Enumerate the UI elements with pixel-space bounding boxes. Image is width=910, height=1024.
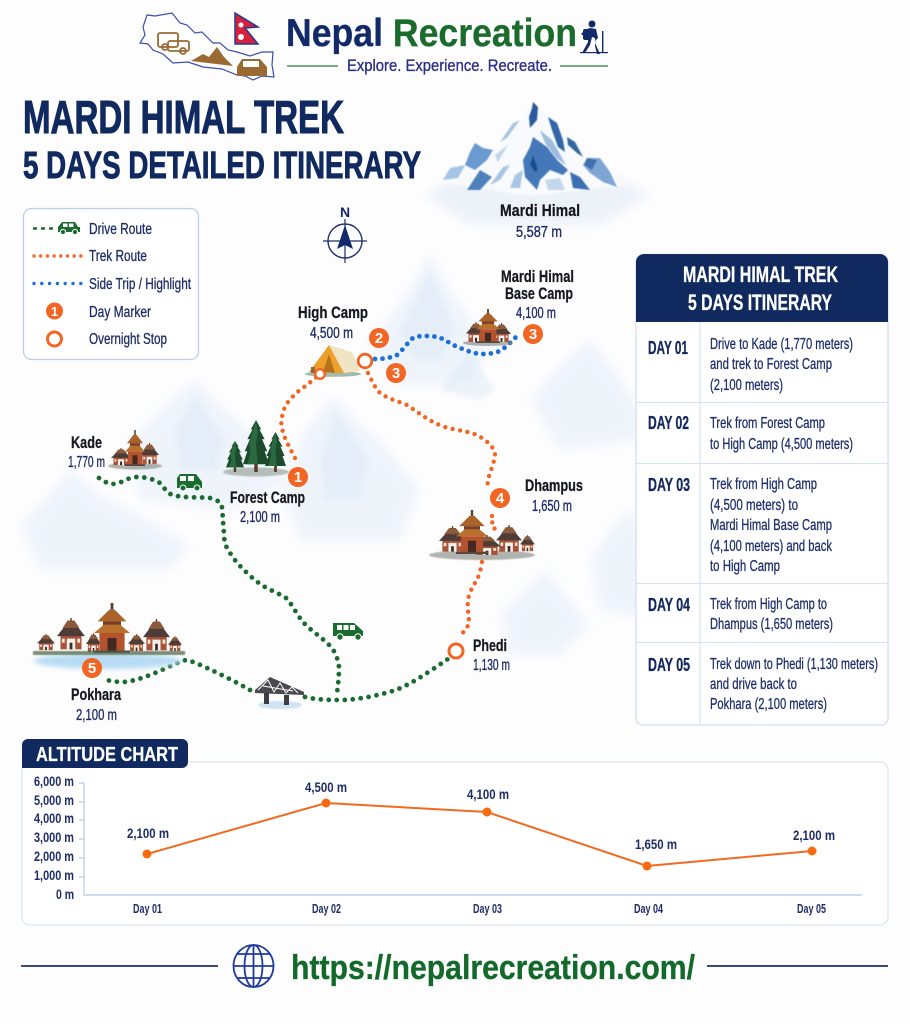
y axis labels: 5,000 m	[34, 792, 74, 808]
marker: day 5	[82, 658, 102, 678]
altitude value labels: 2,100 m	[793, 827, 835, 843]
icon: forest camp trees	[223, 420, 289, 476]
altitude value labels: 1,650 m	[635, 836, 677, 852]
row: day 04: DAY 04	[648, 595, 690, 615]
table header: 5 DAYS ITINERARY	[688, 290, 832, 315]
day labels	[133, 901, 826, 916]
label: Phedi	[473, 636, 510, 674]
row: day 02: Trek from Forest Camp	[710, 415, 825, 432]
tagline: Explore. Experience. Recreate.	[347, 56, 552, 75]
trek route: to Dhampus village	[492, 516, 497, 533]
title: 5 DAYS DETAILED ITINERARY	[23, 145, 421, 187]
brand name: Nepal Recreation	[286, 12, 577, 55]
label: Dhampus	[525, 476, 583, 515]
trek route: Forest Camp to High Camp	[281, 375, 319, 458]
label: Kade	[68, 433, 105, 471]
icon: Pokhara lake town	[33, 603, 185, 669]
y axis labels: 2,000 m	[34, 848, 74, 864]
row: day 01: Drive to Kade (1,770 meters)	[710, 336, 853, 353]
icon: Kade village	[108, 430, 162, 470]
label: Mardi Himal Base Camp: Base Camp	[505, 284, 573, 303]
altitude points	[142, 798, 816, 870]
row: day 01: (2,100 meters)	[710, 377, 783, 394]
legend: drive route: Drive Route	[89, 221, 152, 238]
panel: itinerary table	[636, 254, 888, 725]
row: day 03: to High Camp	[710, 558, 780, 575]
title	[23, 91, 421, 187]
legend panel	[24, 208, 198, 360]
row: day 05	[648, 655, 878, 713]
panel: altitude chart	[22, 739, 888, 925]
legend: trek route: Trek Route	[89, 248, 147, 265]
label: Forest Camp	[230, 488, 305, 526]
label: Mardi Himal: Mardi Himal	[500, 201, 580, 220]
marker: day 4: 4	[496, 490, 505, 507]
icon: Base Camp lodge	[463, 309, 513, 346]
label: Phedi: Phedi	[473, 636, 507, 655]
icon: steel bridge	[255, 677, 304, 709]
row: day 01	[648, 336, 853, 394]
drive route: bridge to Pokhara	[102, 660, 250, 690]
marker: day 2: 2	[375, 330, 383, 347]
row: day 03: DAY 03	[648, 475, 690, 495]
background faded mountains	[20, 254, 650, 655]
row: day 03: Mardi Himal Base Camp	[710, 517, 832, 534]
label: Forest Camp: Forest Camp	[230, 488, 305, 507]
row: day 03: (4,500 meters) to	[710, 497, 798, 514]
row: day 03	[648, 475, 833, 575]
drive route	[99, 477, 339, 693]
marker: day 5: 5	[88, 660, 96, 677]
row: day 02: DAY 02	[648, 413, 689, 433]
row: day 04: Dhampus (1,650 meters)	[710, 616, 833, 633]
day labels: Day 01	[133, 901, 162, 916]
table header	[636, 254, 888, 322]
icon: van on drive route	[333, 623, 363, 640]
icon: Nepal flag	[235, 13, 258, 44]
label: Phedi: 1,130 m	[473, 657, 510, 674]
label: Dhampus: Dhampus	[525, 476, 583, 495]
legend: side trip: Side Trip / Highlight	[89, 276, 191, 293]
trek route: Dhampus to Phedi	[458, 562, 482, 637]
icon: High Camp tent	[305, 345, 361, 377]
icon: van near Kade	[177, 474, 202, 491]
y axis labels: 1,000 m	[34, 867, 74, 883]
label: Mardi Himal Base Camp: Mardi Himal	[501, 267, 574, 286]
table header: MARDI HIMAL TREK	[683, 262, 838, 287]
legend: overnight stop: Overnight Stop	[89, 331, 167, 348]
chart heading: ALTITUDE CHART	[36, 744, 178, 766]
icon: hiker	[580, 20, 608, 54]
label: High Camp	[298, 303, 368, 342]
label: Forest Camp: 2,100 m	[240, 509, 280, 526]
day labels: Day 03	[473, 901, 502, 916]
marker: day 1	[288, 467, 308, 487]
label: Mardi Himal Base Camp	[501, 267, 574, 322]
logo: Nepal Recreation	[140, 12, 608, 80]
legend: day marker: 1	[51, 304, 58, 319]
marker: day 3 at Base Camp: 3	[529, 326, 537, 343]
label: Kade: 1,770 m	[68, 454, 105, 471]
title: MARDI HIMAL TREK	[23, 91, 344, 143]
y axis labels: 6,000 m	[34, 773, 74, 789]
row: day 05: and drive back to	[710, 676, 797, 693]
label: Mardi Himal: 5,587 m	[516, 224, 562, 241]
altitude line	[147, 803, 812, 866]
row: day 05: Pokhara (2,100 meters)	[710, 696, 827, 713]
label: Pokhara: 2,100 m	[76, 707, 117, 724]
drive route: bridge to Phedi	[305, 659, 448, 700]
marker: day 3 at High Camp: 3	[392, 365, 400, 382]
side trip route	[375, 336, 517, 359]
footer	[21, 945, 888, 987]
icon: north compass: N	[340, 204, 350, 220]
marker: overnight High Camp	[358, 354, 372, 368]
marker: High Camp arrival stop	[315, 369, 325, 379]
marker: day 3 at High Camp	[386, 363, 406, 383]
legend: overnight stop	[48, 331, 167, 348]
row: day 05: DAY 05	[648, 655, 690, 675]
day labels: Day 04	[634, 901, 664, 916]
row: day 03: Trek from High Camp	[710, 476, 817, 493]
y axis labels: 3,000 m	[34, 829, 74, 845]
label: High Camp: High Camp	[298, 303, 368, 322]
marker: day 1: 1	[294, 469, 302, 486]
altitude value labels: 4,500 m	[305, 779, 347, 795]
row: day 01: DAY 01	[648, 338, 688, 358]
marker: day 3 at Base Camp	[523, 324, 543, 344]
altitude value labels: 2,100 m	[127, 825, 169, 841]
row: day 04	[648, 595, 833, 633]
y axis labels: 0 m	[56, 886, 74, 902]
marker: day 4	[490, 488, 510, 508]
legend: drive route	[33, 221, 152, 238]
row: day 01: and trek to Forest Camp	[710, 356, 832, 373]
legend: day marker	[46, 302, 151, 321]
label: Kade: Kade	[71, 433, 102, 452]
day labels: Day 05	[797, 901, 826, 916]
y axis labels: 4,000 m	[34, 810, 74, 826]
marker: Phedi overnight stop	[449, 644, 463, 658]
row: day 04: Trek from High Camp to	[710, 596, 827, 613]
y axis labels	[34, 773, 74, 902]
label: Mardi Himal	[500, 201, 580, 241]
trek route: High Camp to Dhampus	[368, 373, 495, 488]
row: day 03: (4,100 meters) and back	[710, 538, 833, 555]
icon: Dhampus village	[429, 510, 535, 560]
altitude value labels	[127, 779, 835, 852]
icon: globe	[234, 945, 274, 987]
legend: trek route	[34, 248, 147, 265]
label: Pokhara: Pokhara	[71, 685, 121, 704]
label: Mardi Himal Base Camp: 4,100 m	[516, 305, 556, 322]
row: day 02	[648, 413, 853, 453]
label: High Camp: 4,500 m	[310, 325, 353, 342]
icon: Nepal map outline with vehicles	[140, 13, 274, 80]
altitude value labels: 4,100 m	[467, 786, 509, 802]
icon: north compass	[323, 204, 367, 263]
label: Dhampus: 1,650 m	[532, 498, 572, 515]
label: Pokhara	[71, 685, 121, 724]
icon: Mardi Himal peak illustration	[425, 102, 650, 225]
chart heading	[22, 739, 188, 768]
website URL: https://nepalrecreation.com/	[291, 949, 695, 987]
marker: day 2	[369, 328, 389, 348]
day labels: Day 02	[312, 901, 341, 916]
legend: day marker: Day Marker	[89, 304, 151, 321]
